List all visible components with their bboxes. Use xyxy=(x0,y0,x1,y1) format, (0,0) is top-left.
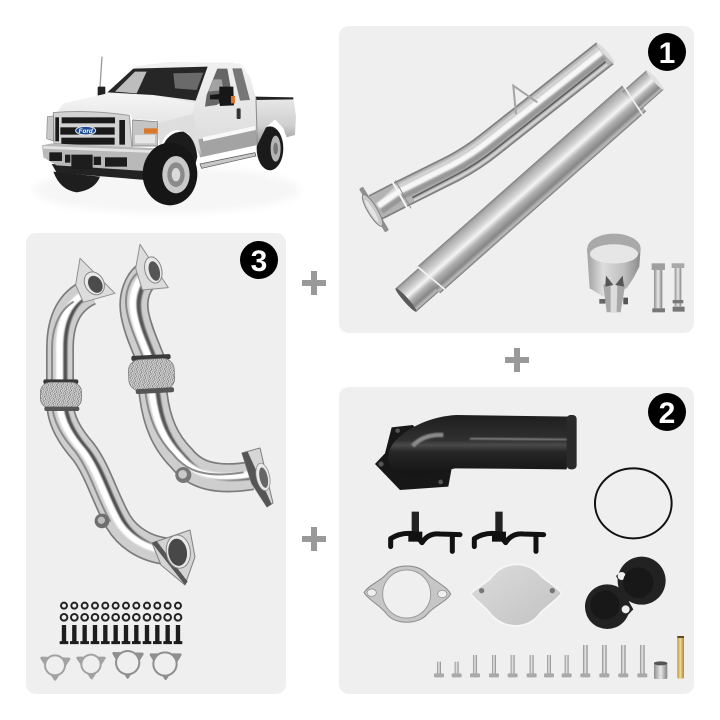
mounting hardware xyxy=(42,603,182,679)
bolt heads xyxy=(434,673,647,677)
left bottom flange xyxy=(152,530,195,585)
left headlight xyxy=(47,116,53,141)
bumper openings xyxy=(49,152,127,169)
number badge 1: 1 xyxy=(659,37,675,70)
plates, caps and bolts xyxy=(364,557,684,679)
plus sign: between panels 3 and 2 xyxy=(302,527,326,551)
chrome pipes xyxy=(40,244,273,585)
o-ring xyxy=(595,468,672,538)
running board xyxy=(200,153,256,168)
gasket xyxy=(364,566,451,622)
rear side window xyxy=(232,68,250,101)
triangular gasket xyxy=(151,651,180,679)
right headlight xyxy=(133,120,157,146)
right top flange xyxy=(136,244,168,290)
front wheel arch xyxy=(160,132,197,173)
number badge 3 xyxy=(240,241,278,279)
right braided flex section xyxy=(128,354,175,394)
left mirror xyxy=(98,87,105,97)
nuts row xyxy=(61,614,181,621)
number badge 1 xyxy=(648,33,686,71)
triangular gasket xyxy=(78,654,104,678)
pickup bed xyxy=(252,97,296,145)
seat through side window xyxy=(208,79,223,92)
hanger bracket xyxy=(513,86,537,114)
triangular gasket xyxy=(42,654,69,679)
door crease highlight xyxy=(203,126,256,141)
washers row xyxy=(61,603,181,609)
brass fitting xyxy=(677,636,684,679)
front fender xyxy=(157,114,202,157)
number badge 2: 2 xyxy=(659,397,675,430)
lower valance xyxy=(52,164,155,181)
intake elbow xyxy=(375,415,577,490)
windshield xyxy=(107,67,208,101)
left braided flex section xyxy=(40,379,82,411)
front wheel xyxy=(143,143,197,205)
triangular gasket xyxy=(114,650,142,677)
right up-pipe xyxy=(126,268,256,478)
elbow, clips and ring xyxy=(375,415,672,551)
short bolts xyxy=(437,645,645,674)
truck photo xyxy=(33,57,300,213)
bolts row xyxy=(60,625,182,643)
antenna xyxy=(100,57,102,87)
pipes and hardware xyxy=(356,42,685,315)
windshield reflection xyxy=(115,72,147,93)
panel background xyxy=(26,233,286,694)
left up-pipe xyxy=(52,291,180,552)
flange xyxy=(356,186,390,234)
panel 3: up pipes xyxy=(26,233,286,694)
left top flange xyxy=(76,258,115,302)
sensor bung right xyxy=(175,467,191,483)
mirror lamp xyxy=(231,96,235,103)
rear wheel xyxy=(257,126,283,170)
band clamp xyxy=(587,234,641,312)
panel background xyxy=(339,26,694,333)
bolt xyxy=(672,263,685,312)
door handle xyxy=(237,108,241,119)
number badge 2 xyxy=(648,393,686,431)
pipe end xyxy=(595,42,616,64)
rubber cap xyxy=(616,557,666,605)
ground shadow xyxy=(33,167,300,213)
bumper highlight xyxy=(43,146,163,153)
roof xyxy=(133,62,242,70)
interior seats xyxy=(173,73,203,90)
side mirror xyxy=(210,87,234,106)
grille surround xyxy=(53,111,132,148)
Ford logo: Ford xyxy=(79,128,93,135)
cab pillar line xyxy=(256,98,257,145)
plus sign: between panels 1 and 2 xyxy=(505,348,529,372)
front left wheel xyxy=(53,172,100,192)
panel 1: down pipes xyxy=(339,26,694,333)
spacer sleeve xyxy=(654,661,667,679)
wire clip xyxy=(391,512,460,551)
hood xyxy=(57,93,195,140)
right bottom flange xyxy=(242,448,273,507)
bed rail xyxy=(255,97,293,100)
bolt xyxy=(652,263,665,312)
panel background xyxy=(339,387,694,694)
panel 2: EGR delete parts xyxy=(339,387,694,694)
bent pipe xyxy=(375,48,607,212)
wire clip xyxy=(474,512,544,551)
straight pipe xyxy=(393,65,668,315)
cab body xyxy=(108,63,257,157)
side window xyxy=(205,69,232,107)
grille bars xyxy=(55,117,125,145)
plus sign: between panels 3 and 1 xyxy=(302,271,326,295)
lower door panel xyxy=(198,127,257,157)
rubber cap xyxy=(585,584,633,629)
Ford logo xyxy=(76,126,96,135)
number badge 3: 3 xyxy=(251,245,267,278)
bumper xyxy=(42,143,164,172)
sensor bung left xyxy=(95,514,109,528)
block-off plate xyxy=(471,564,562,626)
